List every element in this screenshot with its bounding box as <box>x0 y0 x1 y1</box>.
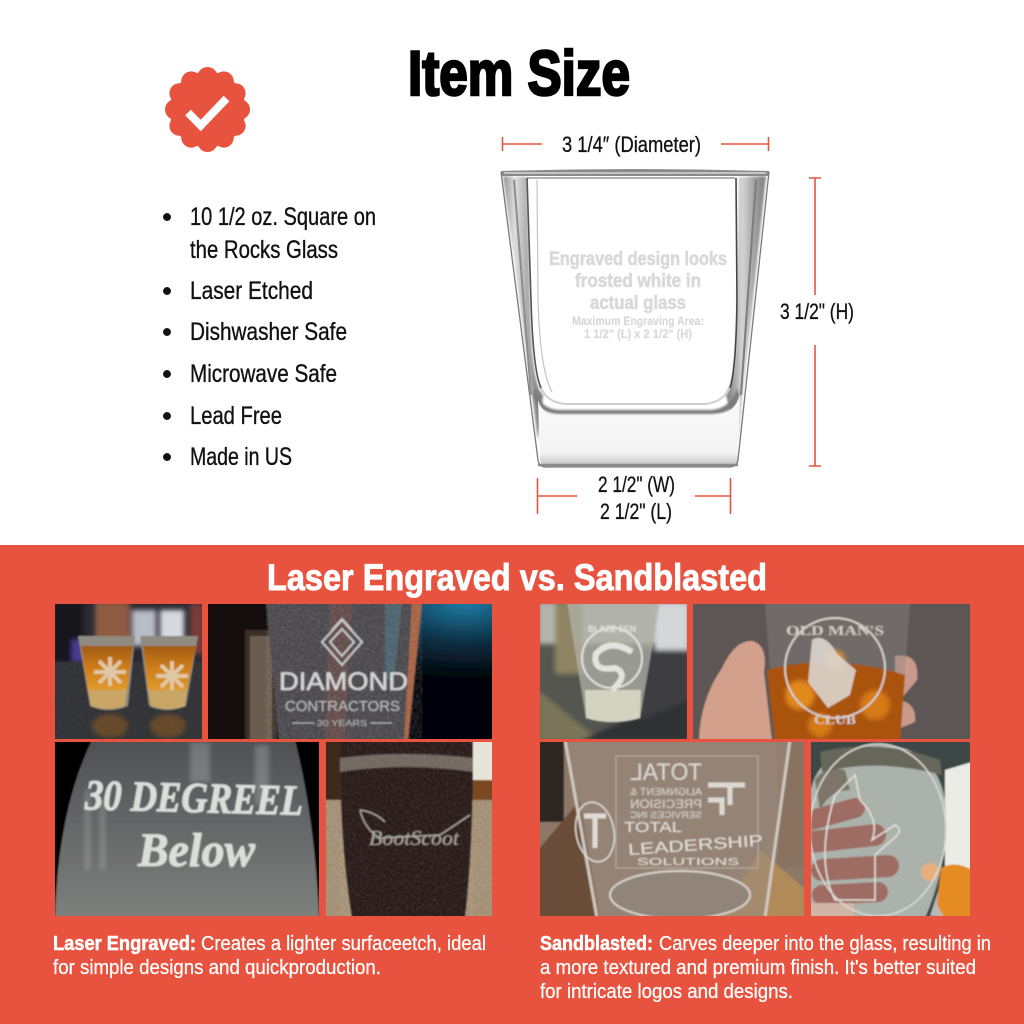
photo: cat stemless wine glass <box>811 742 970 916</box>
diameter dimension: 3 1/4″ (Diameter) <box>562 132 701 157</box>
photo: dragon shot glass <box>540 604 687 739</box>
photo: BootScoot cola glass: BootScoot <box>369 826 460 850</box>
feature list: Microwave Safe <box>190 360 337 388</box>
diameter dimension <box>502 132 768 157</box>
height dimension <box>780 178 854 466</box>
height dimension: 3 1/2" (H) <box>780 299 854 324</box>
engraving note: Engraved design looks <box>549 249 727 270</box>
photo: Old Man's Club glass held in hand: CLUB <box>814 712 856 727</box>
engraving note <box>549 249 727 341</box>
photo: Old Man's Club glass held in hand: OLD MAN'S <box>786 624 884 639</box>
text: sandblasted description: Sandblasted: <box>540 933 653 955</box>
text: sandblasted description <box>540 933 991 1003</box>
icon: verified badge with check mark <box>165 67 250 152</box>
feature list <box>163 203 376 471</box>
text: sandblasted description: a more textured and premium finish. It's better suited <box>540 957 976 979</box>
feature list: the Rocks Glass <box>190 236 338 264</box>
feature list: Laser Etched <box>190 277 313 305</box>
title: Item Size <box>408 39 630 109</box>
panel: laser engraved vs sandblasted <box>0 545 1024 1024</box>
text: sandblasted description: Carves deeper into the glass, resulting in <box>659 933 991 955</box>
feature list: 10 1/2 oz. Square on <box>190 203 376 231</box>
photo: 30 Degreel Below glass: Below <box>137 824 256 877</box>
photo: Total Leadership rocks glass: PRECISION <box>630 797 702 811</box>
engraving note: Maximum Engraving Area: <box>572 314 704 328</box>
photo: Total Leadership rocks glass <box>540 742 804 916</box>
photo: Total Leadership rocks glass: SERVICES INC <box>629 810 702 820</box>
photo: Total Leadership rocks glass: LEADERSHIP <box>628 833 763 859</box>
text: sandblasted description: for intricate logos and designs. <box>540 981 793 1003</box>
photo: Diamond Contractors pint glass: 30 YEARS <box>317 719 367 728</box>
photo: Total Leadership rocks glass: ALIGNMENT & <box>630 787 702 798</box>
feature list: Dishwasher Safe <box>190 318 347 346</box>
feature list: Lead Free <box>190 402 282 430</box>
text: laser engraved description <box>53 933 486 979</box>
photo: BootScoot cola glass <box>326 742 492 916</box>
photo: Diamond Contractors pint glass <box>208 604 492 739</box>
photo: Total Leadership rocks glass: SOLUTIONS <box>637 857 740 868</box>
photo: Diamond Contractors pint glass: CONTRACTORS <box>285 698 400 715</box>
text: laser engraved description: Laser Engraved: <box>53 933 196 955</box>
photo: dragon shot glass: BLAZE SEN <box>588 624 636 634</box>
text: laser engraved description: Creates a lighter surfaceetch, ideal <box>201 933 486 955</box>
width and length dimension: 2 1/2" (L) <box>600 499 672 524</box>
photo: Diamond Contractors pint glass: DIAMOND <box>279 668 408 696</box>
engraving note: 1 1/2" (L) x 2 1/2" (H) <box>584 327 692 341</box>
photo: Old Man's Club glass held in hand <box>693 604 970 739</box>
engraving note: frosted white in <box>575 271 701 292</box>
glass illustration <box>501 169 769 467</box>
photo: Total Leadership rocks glass: TOTAL <box>630 759 702 786</box>
photo: Total Leadership rocks glass: TOTAL <box>624 819 682 836</box>
panel heading: Laser Engraved vs. Sandblasted <box>267 557 767 598</box>
engraving note: actual glass <box>590 293 686 314</box>
width and length dimension: 2 1/2" (W) <box>598 472 675 497</box>
width and length dimension <box>537 472 730 524</box>
feature list: Made in US <box>190 443 292 471</box>
photo: shot glasses with whiskey <box>55 604 202 739</box>
text: laser engraved description: for simple designs and quickproduction. <box>53 957 381 979</box>
photo: 30 Degreel Below glass <box>55 742 319 916</box>
